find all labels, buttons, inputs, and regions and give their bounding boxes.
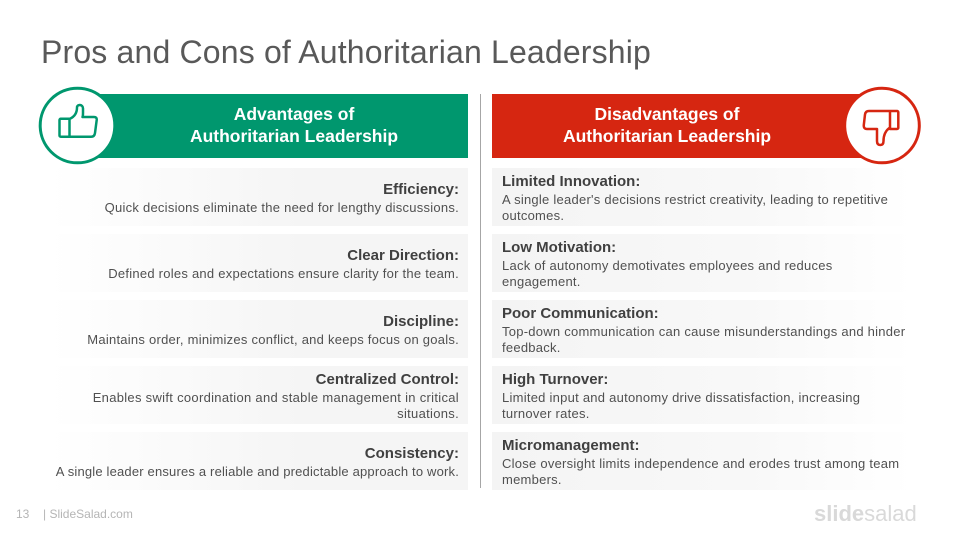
disadvantage row: Poor Communication [492, 300, 912, 358]
advantages heading: Authoritarian Leadership [190, 126, 398, 146]
disadvantage row: Poor Communication: Top-down communication can cause misunderstandings and hinder [502, 324, 905, 339]
advantage row: Efficiency [50, 168, 468, 226]
advantage row: Efficiency: Efficiency: [383, 181, 459, 198]
disadvantage row: Low Motivation: engagement. [502, 274, 581, 289]
disadvantages heading [563, 104, 771, 146]
advantage row: Discipline: Discipline: [383, 313, 459, 330]
disadvantage row: Limited Innovation: Limited Innovation: [502, 173, 640, 190]
disadvantage row: Micromanagement [492, 432, 912, 490]
disadvantage row: Micromanagement: Micromanagement: [502, 437, 640, 454]
disadvantage row: Limited Innovation: A single leader's decisions restrict creativity, leading to repetitive [502, 192, 888, 207]
advantage row: Efficiency: Quick decisions eliminate the need for lengthy discussions. [105, 200, 459, 215]
disadvantage row: Micromanagement: Close oversight limits independence and erodes trust among team [502, 456, 899, 471]
disadvantage row: Limited Innovation: outcomes. [502, 208, 564, 223]
panel: disadvantages [492, 86, 921, 164]
advantages heading: Advantages of [234, 104, 354, 124]
advantage row: Clear Direction: Clear Direction: [347, 247, 459, 264]
disadvantages header bar [492, 94, 882, 158]
advantage row: Clear Direction [50, 234, 468, 292]
disadvantage row: Limited Innovation [492, 168, 912, 226]
disadvantage row: High Turnover: turnover rates. [502, 406, 590, 421]
disadvantage row: Micromanagement: members. [502, 472, 562, 487]
footer: page number and site: | SlideSalad.com [43, 507, 133, 521]
advantage row: Centralized Control: Enables swift coordination and stable management in critical [93, 390, 459, 405]
advantage row: Centralized Control: Centralized Control: [316, 371, 459, 388]
disadvantage row: High Turnover [492, 366, 912, 424]
disadvantage row: Poor Communication: feedback. [502, 340, 561, 355]
advantage row: Discipline: Maintains order, minimizes conflict, and keeps focus on goals. [87, 332, 459, 347]
disadvantage row: Poor Communication: Poor Communication: [502, 305, 659, 322]
footer: page number and site: 13 [16, 507, 29, 521]
disadvantage row: High Turnover: Limited input and autonomy drive dissatisfaction, increasing [502, 390, 860, 405]
icon: thumbs up [38, 86, 114, 164]
advantage row: Consistency: A single leader ensures a reliable and predictable approach to work. [56, 464, 459, 479]
advantages header bar [78, 94, 468, 158]
advantage row: Discipline [50, 300, 468, 358]
disadvantage row: Low Motivation: Lack of autonomy demotivates employees and reduces [502, 258, 832, 273]
disadvantage row: Low Motivation: Low Motivation: [502, 239, 616, 256]
center divider [480, 94, 481, 488]
advantage row: Clear Direction: Defined roles and expectations ensure clarity for the team. [108, 266, 459, 281]
panel: advantages [38, 86, 468, 164]
icon: thumbs down [846, 86, 921, 164]
advantage row: Centralized Control [50, 366, 468, 424]
advantage row: Consistency: Consistency: [365, 445, 459, 462]
disadvantages heading: Authoritarian Leadership [563, 126, 771, 146]
advantage row: Centralized Control: situations. [397, 406, 459, 421]
footer: logo: slidesalad [814, 501, 917, 526]
advantages heading [190, 104, 398, 146]
disadvantage row: Low Motivation [492, 234, 912, 292]
disadvantage row: High Turnover: High Turnover: [502, 371, 608, 388]
advantage row: Consistency [50, 432, 468, 490]
title: Pros and Cons of Authoritarian Leadership [41, 34, 651, 70]
disadvantages heading: Disadvantages of [595, 104, 739, 124]
